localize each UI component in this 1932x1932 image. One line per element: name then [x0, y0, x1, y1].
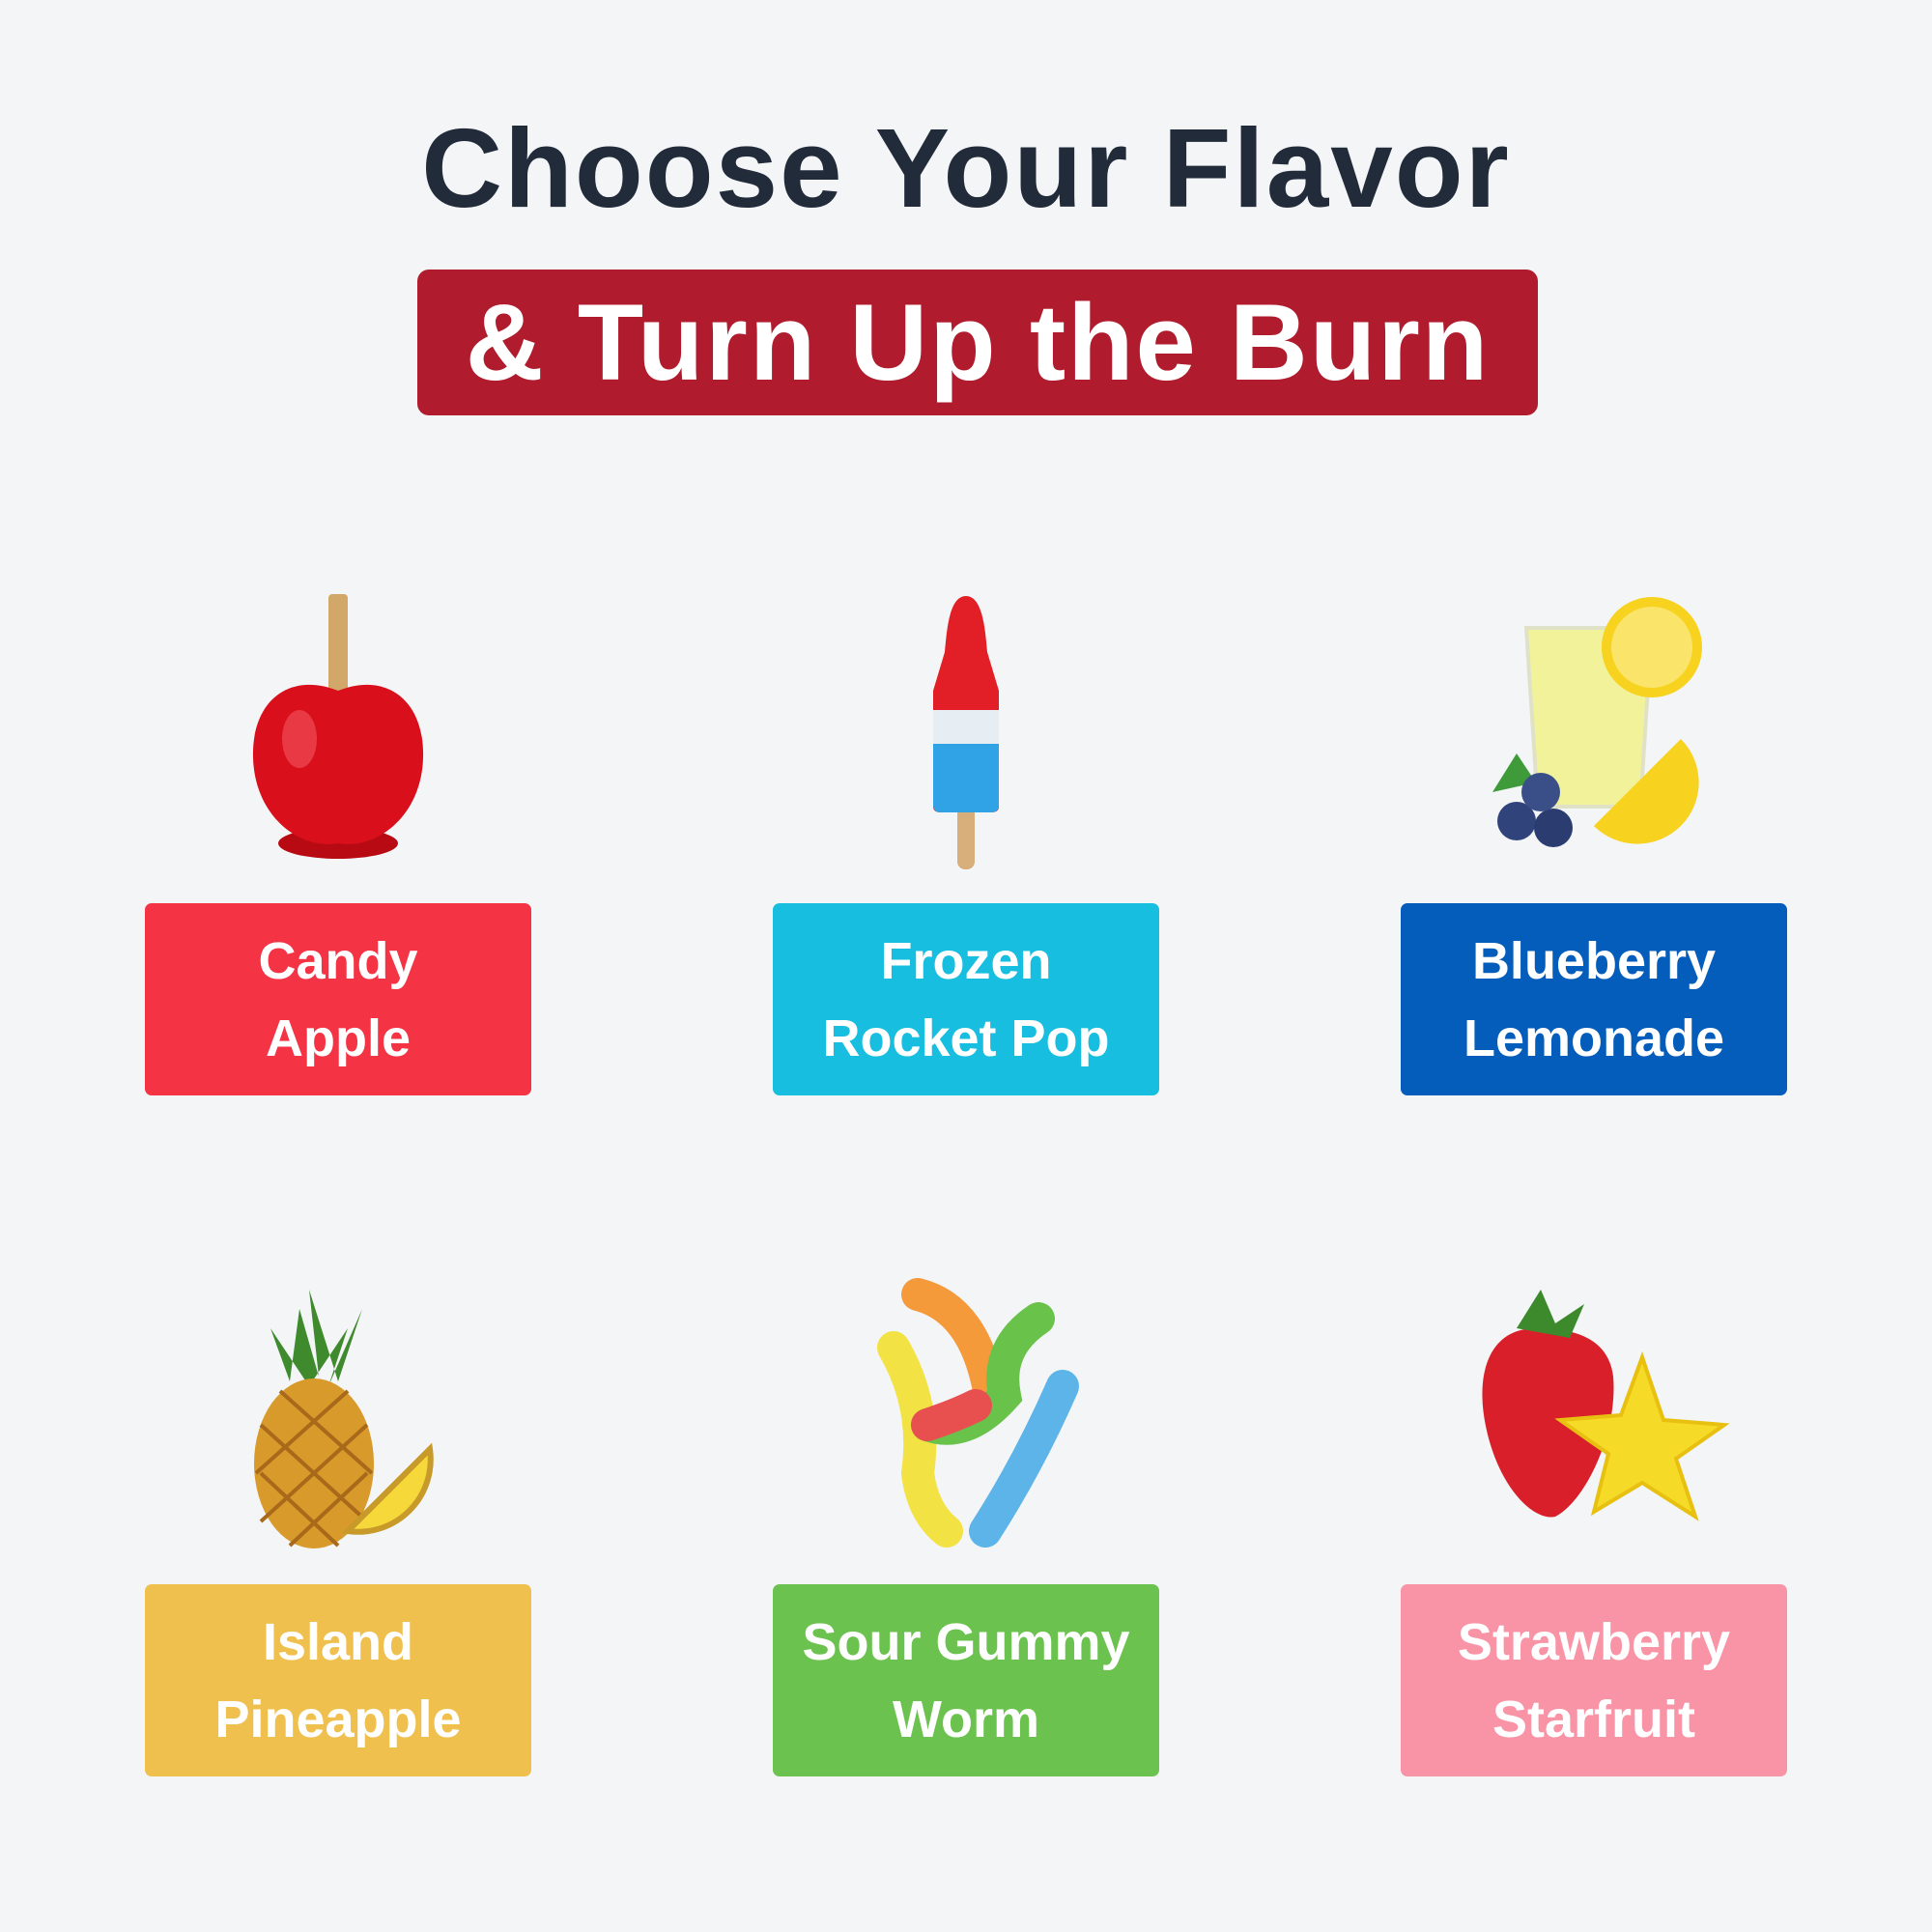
- icon: blueberry lemonade: [1492, 597, 1702, 847]
- label: frozen rocket pop: Frozen: [880, 931, 1051, 989]
- label: strawberry starfruit: Strawberry: [1458, 1613, 1730, 1671]
- label: frozen rocket pop: [773, 903, 1159, 1095]
- label: blueberry lemonade: Blueberry: [1472, 931, 1716, 989]
- icon: candy apple: [253, 594, 423, 859]
- label: sour gummy worm: [773, 1584, 1159, 1776]
- label: strawberry starfruit: Starfruit: [1492, 1690, 1695, 1748]
- label: blueberry lemonade: [1401, 903, 1787, 1095]
- label: island pineapple: [145, 1584, 531, 1776]
- label: sour gummy worm: Sour Gummy: [802, 1613, 1130, 1671]
- label: frozen rocket pop: Rocket Pop: [822, 1009, 1110, 1066]
- icon: pineapple: [254, 1290, 434, 1548]
- label: sour gummy worm: Worm: [893, 1690, 1039, 1748]
- banner subtitle: & Turn Up the Burn: [466, 282, 1490, 403]
- label: candy apple: Apple: [266, 1009, 411, 1066]
- label: blueberry lemonade: Lemonade: [1463, 1009, 1724, 1066]
- label: island pineapple: Island: [263, 1613, 413, 1671]
- label: island pineapple: Pineapple: [214, 1690, 462, 1748]
- icon: rocket pop: [933, 596, 999, 869]
- label: candy apple: Candy: [258, 931, 418, 989]
- title: Choose Your Flavor: [421, 105, 1511, 231]
- label: strawberry starfruit: [1401, 1584, 1787, 1776]
- icon: strawberry starfruit: [1482, 1290, 1730, 1521]
- label: candy apple: [145, 903, 531, 1095]
- icon: gummy worms: [877, 1278, 1079, 1548]
